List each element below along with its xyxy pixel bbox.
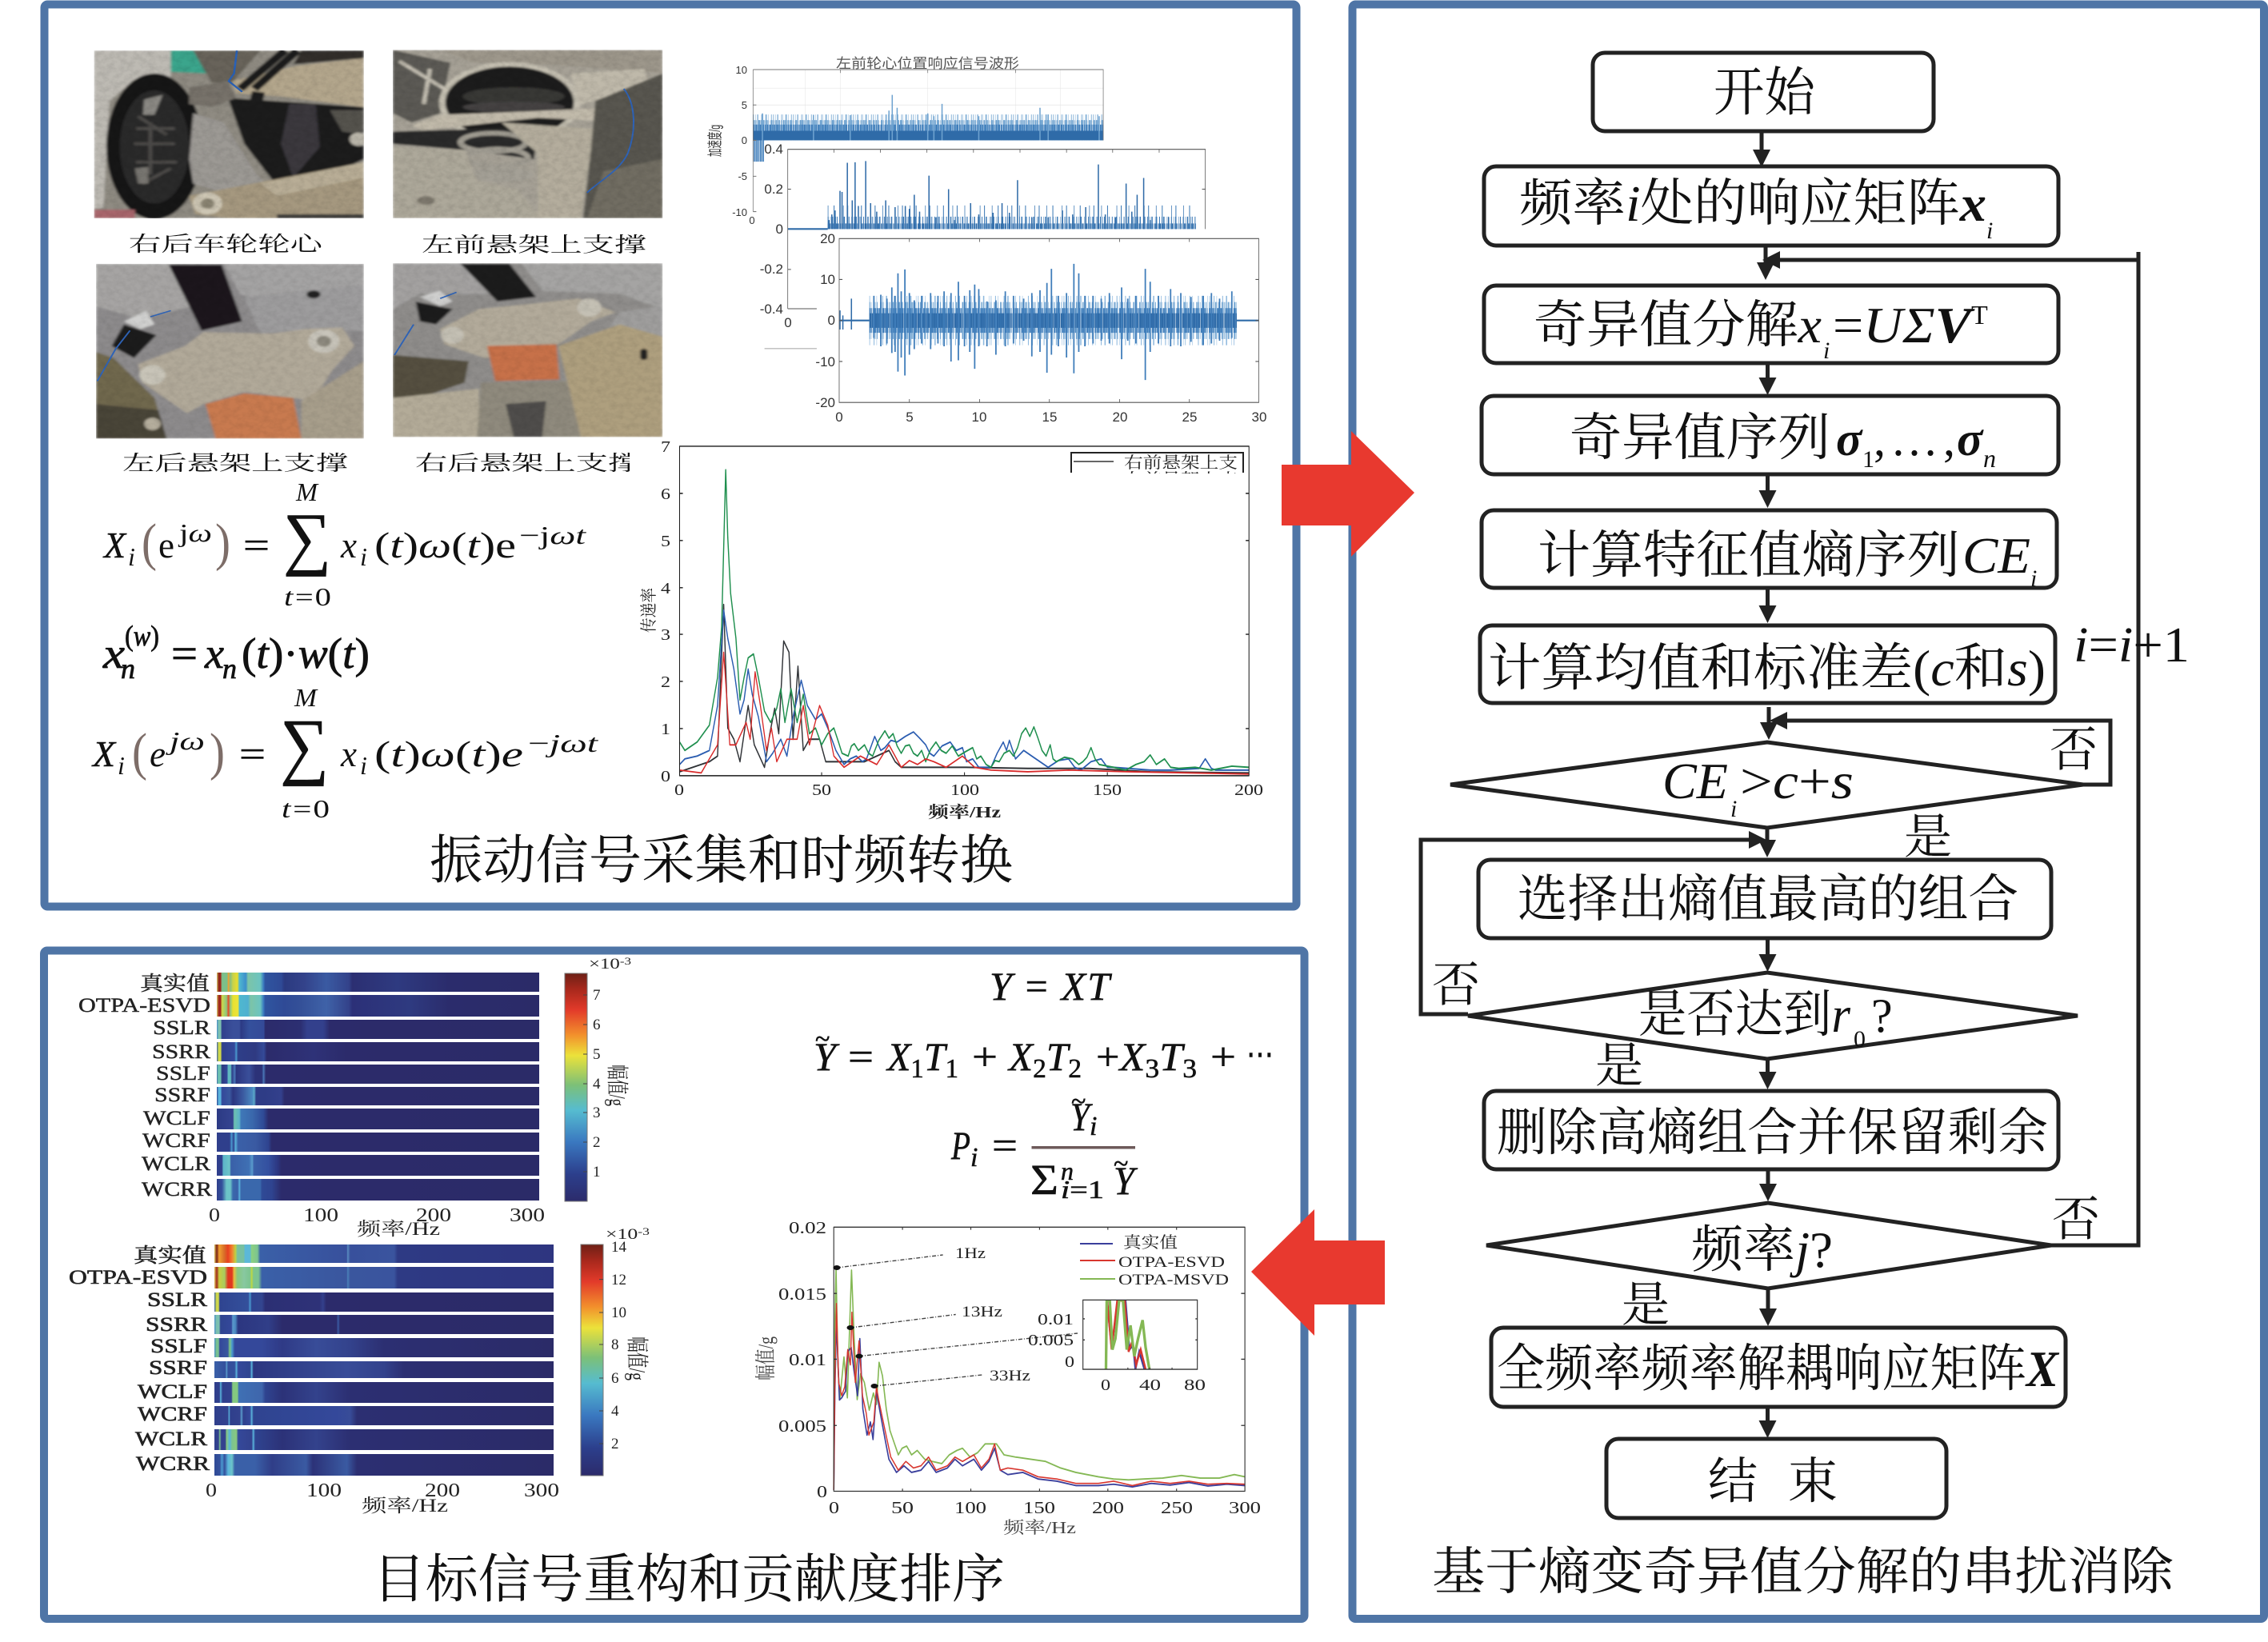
flow box: singular value decomposition: i: [1823, 338, 1830, 364]
flow box: singular value sequence: ,…,: [1874, 413, 1955, 465]
inset chart: 40: [1139, 1376, 1161, 1394]
equation: contribution ratio: =: [992, 1123, 1018, 1168]
loop label: i = i + 1: i=i+1: [2074, 618, 2190, 673]
arrow: from flowchart to reconstruction panel: [1251, 1209, 1385, 1336]
chart: transmissibility spectrum: 5: [661, 533, 670, 550]
colorbar: lower heatmap scale: 2: [611, 1436, 619, 1452]
equation: first Fourier transform: x: [340, 525, 358, 565]
inset chart: [1028, 1300, 1206, 1394]
chart: amplitude spectrum with legend and peaks: 0: [817, 1482, 827, 1501]
photo caption: left front support: 左前悬架上支撑: [422, 234, 646, 257]
flow box: response matrix at frequency i: i: [1986, 218, 1993, 244]
inset chart: 0.01: [1038, 1311, 1074, 1328]
flow diamond: CE greater than c plus s: >c+s: [1740, 753, 1854, 809]
chart: time-domain waveform, wheel centre: [706, 56, 1103, 226]
equation: second Fourier transform: jω: [165, 726, 205, 755]
chart: amplitude spectrum with legend and peaks: 50: [891, 1498, 914, 1517]
flow box: singular value sequence: 奇异值序列: [1570, 410, 1830, 466]
flow box: end: [1606, 1439, 1946, 1518]
flow diamond: CE greater than c plus s: [1450, 742, 2083, 828]
flow box: response matrix at frequency i: 频率i处的响应矩阵x: [1519, 175, 1986, 232]
equation: first Fourier transform: e: [158, 525, 174, 565]
panel title: crosstalk elimination: 基于熵变奇异值分解的串扰消除: [1432, 1544, 2174, 1600]
heatmap: lower contribution spectrum: WCRF: [138, 1404, 207, 1425]
flow box: singular value sequence: σ: [1957, 413, 1984, 465]
chart: time-domain waveform, wheel centre: -5: [738, 170, 747, 182]
arrow: entropy check no loop: [1770, 712, 2110, 785]
equation: window function: (t)·w(t): [242, 629, 370, 677]
colorbar: lower heatmap scale: ×10: [606, 1226, 630, 1243]
heatmap: lower contribution spectrum: OTPA-ESVD: [69, 1267, 207, 1288]
chart: amplitude spectrum with legend and peaks: [754, 1218, 1261, 1537]
decision label: yes: 是: [1622, 1279, 1670, 1332]
flow box: eigenvalue entropy sequence: i: [2030, 565, 2037, 592]
flow box: choose highest entropy combination: 选择出熵值最高的组合: [1518, 871, 2018, 928]
heatmap: lower contribution spectrum: SSLR: [147, 1289, 207, 1311]
equation: first Fourier transform: jω: [178, 518, 212, 547]
chart: time-domain waveform, front: 5: [906, 410, 914, 425]
flow box: eigenvalue entropy sequence: CE: [1962, 527, 2030, 584]
heatmap: upper contribution spectrum: SSRF: [154, 1085, 210, 1106]
chart: amplitude spectrum with legend and peaks: 250: [1161, 1498, 1193, 1517]
chart: transmissibility spectrum: 7: [661, 438, 670, 456]
heatmap: upper contribution spectrum: 300: [510, 1205, 545, 1226]
photo caption: left rear support: 左后悬架上支撑: [122, 452, 348, 475]
chart: time-domain waveform, middle: 0.4: [764, 142, 783, 157]
chart: amplitude spectrum with legend and peaks: 300: [1229, 1498, 1261, 1517]
equation: first Fourier transform: −j ωt: [519, 521, 587, 549]
equation: second Fourier transform: (t)ω(t)e: [374, 733, 523, 774]
colorbar: lower heatmap scale: [581, 1225, 650, 1476]
equation: sum of path contributions: ⋯: [1246, 1037, 1274, 1073]
equation: contribution ratio: ~: [1114, 1149, 1128, 1179]
heatmap: lower contribution spectrum: SSLF: [150, 1336, 207, 1357]
inset chart: 80: [1184, 1376, 1206, 1394]
equation: second Fourier transform: M: [294, 683, 318, 712]
equation: sum of path contributions: 1: [910, 1054, 924, 1084]
chart: time-domain waveform, middle: -0.4: [760, 302, 783, 317]
colorbar: upper heatmap scale: [565, 955, 631, 1201]
flow box: choose highest entropy combination: [1478, 860, 2051, 938]
equation: window function: x: [102, 629, 125, 677]
chart legend: OTPA-ESVD: [1118, 1254, 1225, 1271]
heatmap: lower contribution spectrum: 200: [425, 1480, 460, 1501]
equation: first Fourier transform: t= 0: [284, 582, 331, 611]
flow diamond: frequency j: [1486, 1203, 2051, 1288]
heatmap: lower contribution spectrum: 频率/Hz: [362, 1496, 448, 1516]
equation: second Fourier transform: t= 0: [282, 794, 330, 823]
colorbar: upper heatmap scale: 3: [593, 1105, 600, 1121]
equation: sum of path contributions: 1: [946, 1054, 958, 1084]
chart: transmissibility spectrum: 右前悬架上支: [1124, 453, 1238, 472]
heatmap: upper contribution spectrum: OTPA-ESVD: [78, 995, 210, 1017]
colorbar: lower heatmap scale: 8: [611, 1336, 619, 1353]
chart: time-domain waveform, front: 20: [820, 231, 835, 246]
heatmap: upper contribution spectrum: 频率/Hz: [357, 1219, 440, 1239]
chart: transmissibility spectrum: 2: [661, 673, 670, 691]
equation: second Fourier transform: [91, 683, 599, 823]
equation: first Fourier transform: i: [360, 542, 367, 571]
equation: sum of path contributions: T: [1046, 1034, 1070, 1079]
equation: contribution ratio: [950, 1087, 1138, 1204]
inset chart: 0: [1065, 1353, 1074, 1371]
chart: transmissibility spectrum: 0: [661, 768, 670, 785]
equation: second Fourier transform: i: [360, 751, 367, 780]
chart: transmissibility spectrum: 频率/Hz: [928, 803, 1001, 821]
equation: second Fourier transform: i: [118, 751, 125, 780]
decision label: yes: 是: [1595, 1040, 1643, 1093]
colorbar: lower heatmap scale: 6: [611, 1370, 619, 1387]
photo: right rear suspension upper support: [393, 263, 662, 437]
heatmap: upper contribution spectrum: SSRR: [152, 1041, 210, 1063]
equation: window function: n: [222, 653, 237, 685]
equation: sum of path contributions: T: [1159, 1034, 1186, 1079]
chart: amplitude spectrum with legend and peaks: 0.01: [789, 1350, 826, 1369]
flow box: singular value sequence: 1: [1862, 446, 1874, 473]
equation: first Fourier transform: (: [142, 513, 157, 572]
chart: transmissibility spectrum: [639, 438, 1263, 821]
chart: time-domain waveform, wheel centre: 0: [742, 134, 747, 146]
heatmap: lower contribution spectrum: 0: [206, 1480, 217, 1501]
equation: contribution ratio: Y: [1114, 1158, 1138, 1203]
equation: first Fourier transform: =: [243, 525, 270, 565]
colorbar: upper heatmap scale: 2: [593, 1134, 600, 1151]
chart: time-domain waveform, front: 10: [972, 410, 986, 425]
flow box: mean and standard deviation: 计算均值和标准差( c和s): [1488, 640, 2046, 697]
equation: sum of path contributions: +: [972, 1034, 998, 1079]
colorbar: lower heatmap scale: 幅值/g: [624, 1336, 650, 1380]
flow diamond: reached r0: 0: [1854, 1026, 1866, 1053]
flow diamond: frequency j: 频率j?: [1691, 1221, 1833, 1278]
colorbar: lower heatmap scale: -3: [638, 1225, 650, 1237]
peak annotations: 13Hz: [962, 1304, 1002, 1320]
heatmap: lower contribution spectrum: SSRF: [149, 1357, 207, 1379]
chart: transmissibility spectrum: 传递率: [639, 588, 658, 633]
chart: time-domain waveform, wheel centre: 10: [736, 64, 747, 76]
flow box: full-frequency decoupled response matrix: 全频率频率解耦响应矩阵X: [1497, 1340, 2059, 1397]
heatmap: lower contribution spectrum: WCLR: [135, 1428, 207, 1450]
equation: contribution ratio: Y: [1070, 1094, 1093, 1139]
heatmap: lower contribution spectrum: 300: [524, 1480, 559, 1501]
heatmap: upper contribution spectrum: WCLF: [143, 1108, 210, 1129]
photo: left rear suspension upper support: [96, 264, 364, 438]
colorbar: lower heatmap scale: 12: [611, 1272, 626, 1288]
chart: time-domain waveform, front: 0: [835, 410, 843, 425]
flow diamond: reached r0: [1468, 973, 2078, 1059]
photo caption: right rear wheel centre: 右后车轮轮心: [129, 233, 324, 256]
equation: Y = XT: Y = XT: [990, 964, 1112, 1009]
equation: window function: [102, 620, 370, 685]
chart: transmissibility spectrum: 4: [661, 580, 670, 597]
equation: second Fourier transform: e: [150, 733, 166, 774]
equation: contribution ratio: n: [1061, 1157, 1074, 1185]
heatmap: upper contribution spectrum: WCRF: [142, 1130, 210, 1152]
colorbar: upper heatmap scale: 6: [593, 1017, 600, 1033]
chart legend: [1080, 1233, 1229, 1288]
equation: second Fourier transform: X: [91, 733, 117, 774]
flow box: singular value decomposition: [1484, 286, 2058, 364]
colorbar: upper heatmap scale: 1: [593, 1164, 600, 1181]
equation: first Fourier transform: ): [215, 513, 230, 572]
panel: vibration signal acquisition: [45, 5, 1296, 907]
equation: contribution ratio: i: [1090, 1112, 1097, 1141]
heatmap: upper contribution spectrum: SSLR: [153, 1017, 210, 1039]
equation: sum of path contributions: 2: [1068, 1054, 1082, 1084]
equation: first Fourier transform: i: [128, 542, 135, 571]
chart legend: 真实值: [1123, 1233, 1178, 1252]
chart: time-domain waveform, front: 15: [1042, 410, 1057, 425]
chart: time-domain waveform, wheel centre: -10: [732, 206, 747, 218]
colorbar: upper heatmap scale: 5: [593, 1046, 600, 1063]
colorbar: lower heatmap scale: 4: [611, 1403, 619, 1420]
chart: time-domain waveform, front: 25: [1182, 410, 1197, 425]
equation: sum of path contributions: X: [887, 1034, 912, 1079]
equation: sum of path contributions: 2: [1033, 1054, 1046, 1084]
chart: amplitude spectrum with legend and peaks: 0.005: [778, 1416, 826, 1436]
arrow: frequency loop back: [1762, 251, 2138, 1245]
panel title: reconstruction and contribution ranking: 目标信号重构和贡献度排序: [373, 1551, 1005, 1609]
chart: transmissibility spectrum: 100: [950, 781, 979, 799]
heatmap: upper contribution spectrum: 200: [416, 1205, 451, 1226]
photo: right rear wheel hub: [94, 50, 367, 219]
chart: time-domain waveform, front: 20: [1113, 410, 1127, 425]
flow diamond: CE greater than c plus s: CE: [1662, 753, 1728, 809]
chart: time-domain waveform, wheel centre: 左前轮心位置响应信号波形: [836, 56, 1019, 71]
peak annotations: 33Hz: [990, 1368, 1030, 1384]
equation: sum of path contributions: X: [1009, 1034, 1034, 1079]
flow box: delete high entropy combinations: 删除高熵组合并保留剩余: [1497, 1105, 2048, 1161]
arrow: r0 no loop: [1421, 831, 1766, 1014]
chart: amplitude spectrum with legend and peaks: 0.02: [789, 1218, 826, 1237]
chart: time-domain waveform, front: -20: [815, 395, 835, 410]
heatmap: upper contribution spectrum: SSLF: [156, 1063, 210, 1085]
colorbar: upper heatmap scale: -3: [620, 955, 631, 967]
equation: second Fourier transform: =: [239, 733, 266, 774]
heatmap: lower contribution spectrum: 真实值: [134, 1244, 206, 1267]
flow box: start: 开始: [1714, 64, 1817, 122]
chart: transmissibility spectrum: 3: [661, 626, 670, 644]
equation: first Fourier transform: ∑: [283, 500, 331, 577]
photo caption: right rear support: 右后悬架上支撑: [415, 452, 640, 475]
equation: window function: n: [121, 653, 135, 685]
heatmap: upper contribution spectrum: 真实值: [140, 973, 210, 995]
flow box: end: 束: [1788, 1455, 1838, 1509]
equation: contribution ratio: Σ: [1030, 1156, 1058, 1204]
decision label: no: 否: [2050, 724, 2098, 777]
heatmap: upper contribution spectrum: [78, 973, 545, 1239]
colorbar: upper heatmap scale: 4: [593, 1076, 601, 1093]
flow box: end: 结: [1708, 1455, 1758, 1509]
flow box: eigenvalue entropy sequence: [1482, 510, 2057, 592]
chart: time-domain waveform, front: -10: [815, 354, 835, 370]
flow box: singular value decomposition: T: [1971, 301, 1988, 330]
flow box: response matrix at frequency i: [1484, 166, 2058, 246]
panel: entropy SVD crosstalk elimination flowchart: [1352, 5, 2264, 1619]
chart: time-domain waveform, middle: [760, 142, 1212, 350]
equation: second Fourier transform: − jωt: [528, 729, 599, 757]
flow box: singular value sequence: n: [1983, 444, 1996, 473]
panel title: vibration signal acquisition: 振动信号采集和时频转换: [430, 832, 1013, 890]
heatmap: lower contribution spectrum: WCLF: [138, 1381, 207, 1403]
decision label: no: 否: [2052, 1193, 2100, 1246]
chart: time-domain waveform, wheel centre: 5: [742, 99, 747, 111]
chart: transmissibility spectrum: 1: [661, 721, 670, 738]
flow diamond: reached r0: 是否达到r: [1638, 986, 1851, 1043]
chart: amplitude spectrum with legend and peaks: 200: [1092, 1498, 1124, 1517]
chart: time-domain waveform, wheel centre: 0: [749, 214, 755, 226]
equation: second Fourier transform: x: [340, 733, 358, 774]
heatmap: lower contribution spectrum: [69, 1244, 559, 1516]
equation: first Fourier transform: M: [295, 477, 319, 506]
equation: sum of path contributions: ~: [815, 1025, 830, 1054]
equation: sum of path contributions: +X: [1096, 1034, 1144, 1079]
photo: left front suspension upper support: [393, 50, 662, 218]
chart: transmissibility spectrum: 50: [812, 781, 831, 799]
chart: time-domain waveform, front: 30: [1252, 410, 1266, 425]
flow box: singular value sequence: [1482, 396, 2058, 474]
flow diamond: CE greater than c plus s: i: [1730, 796, 1737, 822]
equation: sum of path contributions: Y: [814, 1034, 840, 1079]
inset chart: 0.005: [1028, 1332, 1074, 1349]
heatmap: upper contribution spectrum: 100: [303, 1205, 338, 1226]
heatmap: upper contribution spectrum: WCLR: [142, 1153, 210, 1175]
flow box: start: [1593, 53, 1934, 131]
chart: transmissibility spectrum: 150: [1093, 781, 1122, 799]
heatmap: lower contribution spectrum: WCRR: [136, 1453, 210, 1475]
heatmap: upper contribution spectrum: 0: [209, 1205, 220, 1226]
chart: time-domain waveform, middle: -0.2: [760, 262, 783, 277]
colorbar: lower heatmap scale: 10: [611, 1304, 626, 1321]
colorbar: lower heatmap scale: 14: [611, 1239, 627, 1256]
chart: amplitude spectrum with legend and peaks: 0: [829, 1498, 839, 1517]
chart: transmissibility spectrum: 左前悬架上支: [1124, 470, 1238, 489]
colorbar: upper heatmap scale: ×10: [589, 956, 613, 973]
equation: window function: (w): [125, 620, 159, 652]
flow box: singular value decomposition: 奇异值分解x: [1534, 297, 1822, 354]
chart: amplitude spectrum with legend and peaks: 0.015: [778, 1284, 826, 1304]
chart: time-domain waveform, wheel centre: 加速度/g: [706, 125, 724, 157]
chart: time-domain waveform, front: 10: [820, 272, 835, 287]
chart legend: OTPA-MSVD: [1118, 1272, 1229, 1288]
equation: sum of path contributions: 3: [1145, 1054, 1159, 1084]
heatmap: upper contribution spectrum: WCRR: [142, 1179, 212, 1201]
chart: amplitude spectrum with legend and peaks: 150: [1023, 1498, 1055, 1517]
equation: window function: x: [204, 629, 224, 677]
equation: contribution ratio: P: [950, 1123, 970, 1168]
chart: time-domain waveform, middle: 0.2: [764, 182, 783, 197]
chart: time-domain waveform, middle: 0: [784, 315, 792, 330]
chart: amplitude spectrum with legend and peaks: 频率/Hz: [1003, 1518, 1076, 1537]
equation: window function: =: [171, 629, 198, 677]
flow arrows: [1421, 131, 2138, 1438]
equation: contribution ratio: i: [970, 1143, 978, 1173]
equation: second Fourier transform: ∑: [280, 705, 329, 787]
chart: transmissibility spectrum: 0: [674, 781, 684, 799]
inset chart: 0: [1101, 1376, 1110, 1394]
flow diamond: reached r0: ?: [1871, 989, 1893, 1042]
chart: amplitude spectrum with legend and peaks: 幅值/g: [754, 1336, 778, 1380]
colorbar: upper heatmap scale: 7: [593, 987, 600, 1004]
chart: transmissibility spectrum: 6: [661, 485, 670, 503]
flow box: singular value decomposition: =UΣV: [1833, 297, 1976, 354]
chart: time-domain waveform, front: 0: [828, 313, 835, 328]
decision label: no: 否: [1432, 959, 1480, 1012]
equation: second Fourier transform: (: [132, 723, 147, 781]
equation: first Fourier transform: (t)ω(t)e: [374, 525, 516, 565]
equation: sum of path contributions: =: [848, 1034, 874, 1079]
decision label: yes: 是: [1904, 811, 1952, 864]
chart: transmissibility spectrum: 200: [1234, 781, 1263, 799]
heatmap: lower contribution spectrum: 100: [306, 1480, 342, 1501]
equation: sum of path contributions: +: [1210, 1034, 1236, 1079]
arrow: from acquisition panel to flowchart: [1282, 431, 1414, 557]
chart: time-domain waveform, front: [815, 230, 1266, 427]
equation: sum of path contributions: T: [924, 1034, 948, 1079]
equation: contribution ratio: ~: [1071, 1087, 1086, 1117]
peak annotations: 1Hz: [955, 1245, 986, 1262]
panel: target signal reconstruction: [44, 950, 1304, 1619]
equation: contribution ratio: i=1: [1061, 1175, 1104, 1204]
peak annotations: [834, 1245, 1078, 1388]
equation: first Fourier transform: X: [102, 525, 127, 565]
equation: first Fourier transform: [102, 477, 587, 611]
heatmap: lower contribution spectrum: SSRR: [146, 1314, 207, 1336]
chart: amplitude spectrum with legend and peaks: 100: [954, 1498, 986, 1517]
equation: sum of path contributions: [814, 1025, 1274, 1084]
colorbar: upper heatmap scale: 幅值/g: [604, 1065, 630, 1106]
equation: second Fourier transform: ): [210, 723, 225, 781]
chart: time-domain waveform, middle: 0: [776, 222, 783, 237]
equation: sum of path contributions: 3: [1182, 1054, 1197, 1084]
flow box: singular value sequence: σ: [1836, 413, 1863, 465]
flow box: eigenvalue entropy sequence: 计算特征值熵序列: [1538, 527, 1960, 584]
